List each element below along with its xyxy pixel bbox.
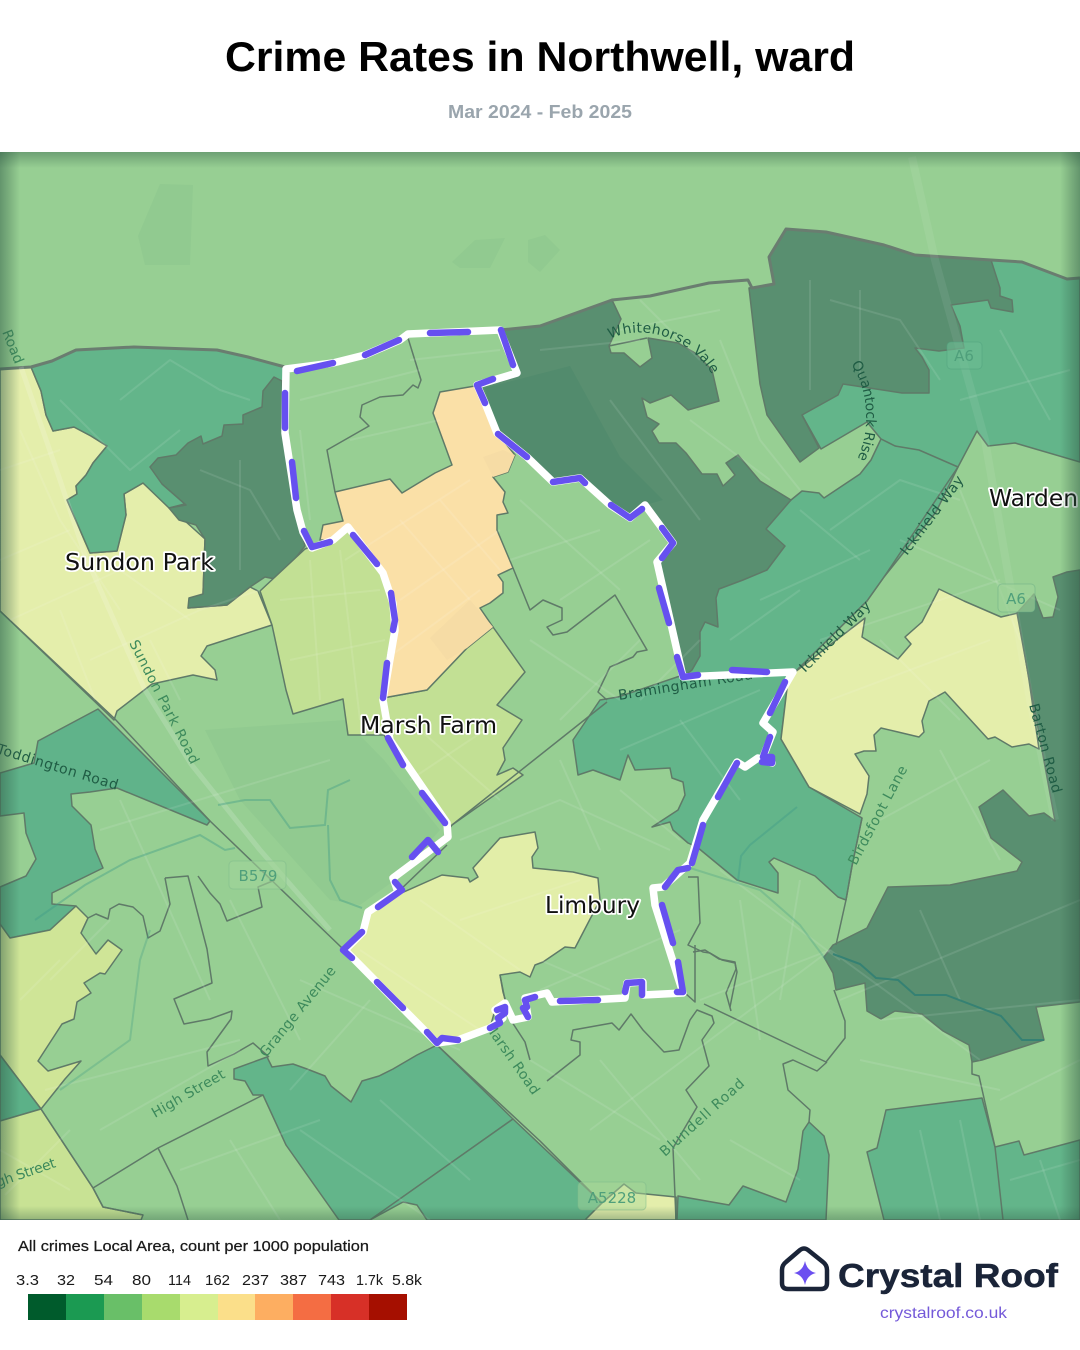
shield: A6 south: A6 (1006, 590, 1026, 608)
legend (16, 1238, 423, 1320)
map edge vignette (0, 152, 1080, 1220)
crime-rate areas (0, 229, 1080, 1220)
base terrain shading (138, 184, 560, 905)
road labels: Quantock Rise (853, 361, 877, 460)
icon: sparkle (794, 1261, 816, 1285)
legend scale values: 387 (280, 1272, 307, 1289)
map base (0, 152, 1080, 1220)
subtitle: date range: Mar 2024 - Feb 2025 (448, 102, 632, 122)
road labels: Icknield Way (897, 473, 967, 558)
road labels (0, 322, 1063, 1189)
ward outline: purple dashes (285, 330, 785, 1043)
place labels: Limbury (545, 893, 640, 919)
legend scale values: 32 (57, 1272, 75, 1289)
legend scale values: 1.7k (356, 1272, 383, 1289)
street network (0, 157, 1080, 1220)
title: Crime Rates in Northwell, ward (225, 33, 855, 80)
legend scale values: 114 (168, 1272, 191, 1289)
legend colour ramp (28, 1294, 407, 1320)
ward boundary: Northwell (285, 330, 793, 1043)
boundary lines (0, 338, 1003, 1220)
legend scale values: 54 (94, 1272, 113, 1289)
road labels: Grange Avenue (257, 963, 340, 1061)
legend title: All crimes Local Area, count per 1000 population (18, 1238, 369, 1255)
legend scale values: 162 (205, 1272, 230, 1289)
legend scale values: 743 (318, 1272, 345, 1289)
panel: choropleth map (0, 152, 1080, 1220)
place labels: Marsh Farm (360, 713, 497, 739)
road labels: Icknield Way (797, 598, 874, 676)
legend scale values: 5.8k (392, 1272, 423, 1289)
place labels: Warden (989, 486, 1078, 512)
legend scale values: 80 (132, 1272, 151, 1289)
road labels: Blundell Road (657, 1076, 748, 1160)
wordmark: Crystal Roof (838, 1257, 1059, 1294)
logo: Crystal Roof (782, 1248, 1059, 1322)
legend scale values: 3.3 (16, 1272, 39, 1289)
road labels: Whitehorse Vale (606, 322, 717, 374)
watercourses (35, 780, 1044, 1090)
shield: A6 south (998, 584, 1035, 612)
legend scale values: 237 (242, 1272, 269, 1289)
road shields (229, 342, 1035, 1210)
northern boundary edge (0, 229, 1080, 369)
shield: A5228: A5228 (588, 1189, 636, 1207)
shield: A6 north (947, 342, 982, 369)
place labels: Sundon Park (65, 550, 215, 576)
road labels: High Street (149, 1066, 228, 1121)
road labels: Barton Road (1025, 702, 1064, 795)
shield: B579: B579 (239, 867, 277, 885)
road labels: Sundon Park Road (125, 638, 202, 767)
road labels: Marsh Road (481, 1019, 543, 1098)
shield: B579 (229, 861, 286, 889)
icon: house outline (782, 1248, 827, 1289)
road labels: Birdsfoot Lane (845, 763, 911, 868)
legend scale values (16, 1272, 423, 1289)
shield: A6 north: A6 (954, 347, 974, 365)
shield: A5228 (578, 1182, 646, 1210)
road labels: Bramingham Road (617, 667, 754, 704)
place labels (65, 486, 1078, 919)
ward outline: white casing (285, 330, 793, 1043)
darker shading patches (464, 454, 515, 650)
website url: crystalroof.co.uk (880, 1305, 1008, 1322)
